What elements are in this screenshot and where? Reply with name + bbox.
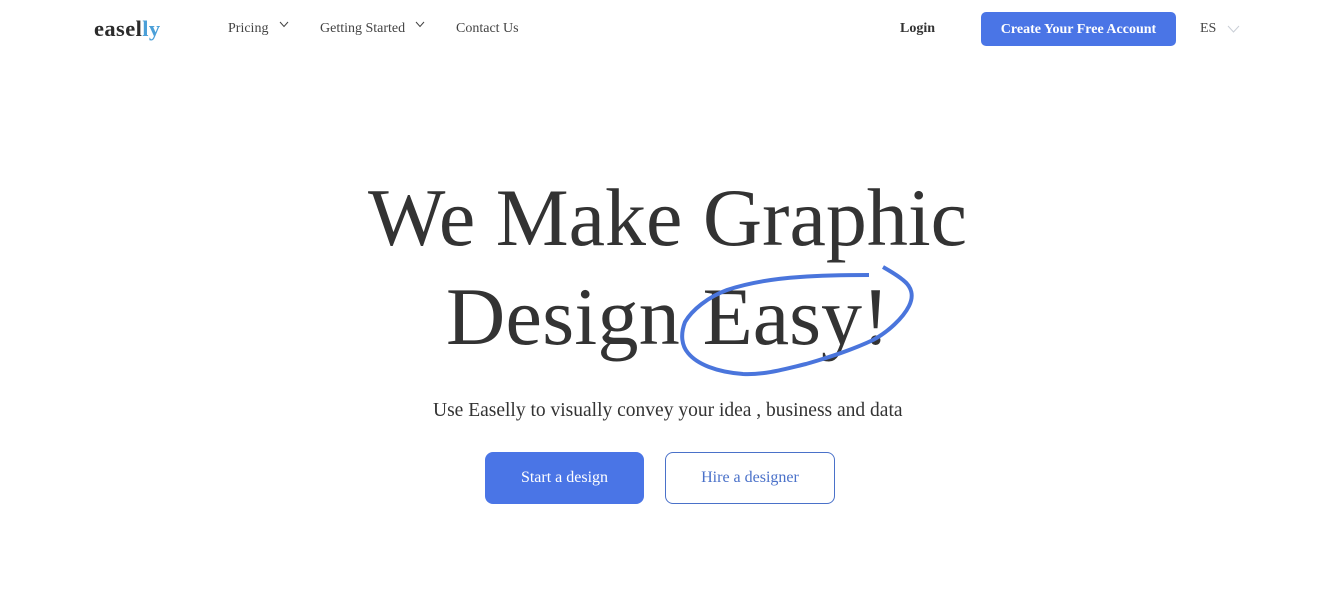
login link: Login [900, 21, 935, 36]
button: start a design [485, 452, 644, 504]
icon: language chevron [1228, 26, 1240, 32]
button: create account: Create Your Free Account [1001, 22, 1156, 37]
title line 2: Design Easy! [446, 271, 889, 362]
title line 1: We Make Graphic [368, 172, 967, 263]
icon: Pricing chevron [280, 22, 288, 28]
nav: Getting Started: Getting Started [320, 21, 405, 36]
button: create account [981, 12, 1176, 46]
nav: Pricing: Pricing [228, 21, 268, 36]
button: hire a designer: Hire a designer [701, 469, 799, 486]
subtitle: Use Easelly to visually convey your idea , business and data [433, 400, 903, 421]
language selector: ES [1200, 21, 1216, 36]
nav: Contact Us: Contact Us [456, 21, 519, 36]
button: hire a designer [665, 452, 835, 504]
logo: easelly [94, 16, 161, 41]
icon: Getting Started chevron [416, 22, 424, 28]
button: start a design: Start a design [521, 469, 608, 486]
